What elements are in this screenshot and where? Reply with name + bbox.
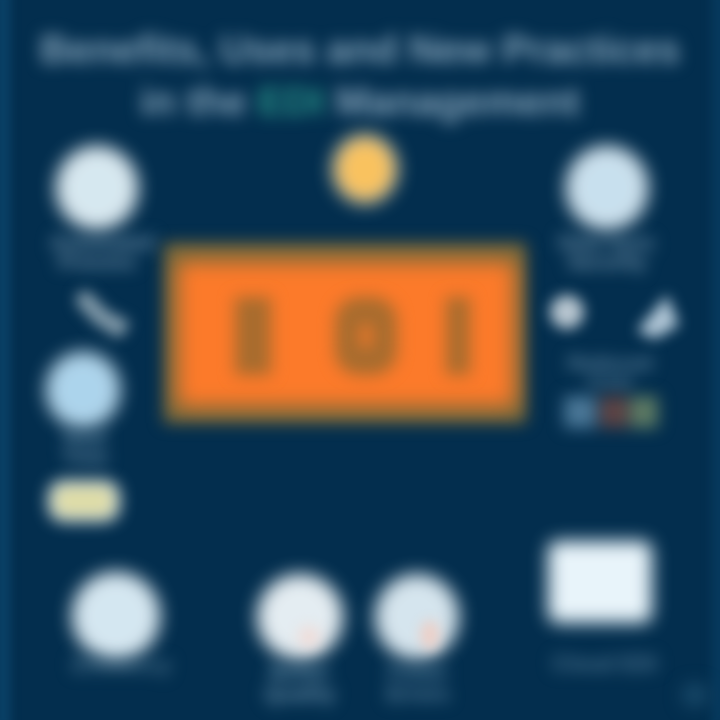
icon: laptop xyxy=(548,541,652,623)
icon: top right circle xyxy=(571,151,643,225)
label: right middle: Cost xyxy=(588,373,632,395)
label: bottom 3: Fewer xyxy=(388,661,448,684)
icon: left middle circle xyxy=(49,355,117,425)
label: top right: Data Sync xyxy=(559,232,655,254)
label: bottom 3 xyxy=(382,661,452,707)
icon: right dot xyxy=(550,295,584,329)
icon: gold circle xyxy=(336,138,394,200)
panel: EDI orange block face xyxy=(178,262,514,406)
icon: bottom circle 3 xyxy=(379,578,455,656)
label: laptop: Cloud EDI xyxy=(552,651,657,676)
label: left middle: Time xyxy=(62,447,108,469)
icon: left bottom chip xyxy=(54,486,114,516)
label: bottom 2: Better xyxy=(270,661,330,684)
label: left middle xyxy=(58,427,112,470)
icon: right arrow xyxy=(631,290,687,348)
label: top right: Security xyxy=(568,252,646,274)
label: top left xyxy=(46,230,160,276)
accent on circle 3 xyxy=(420,620,440,650)
label: right middle xyxy=(564,350,656,395)
label: top right xyxy=(554,228,658,278)
legend chips xyxy=(555,386,668,438)
heading: EDI letters: EDI xyxy=(225,297,227,298)
icon: bottom circle 2 xyxy=(261,578,339,656)
label: bottom 1: Efficiency xyxy=(72,654,171,677)
icon: bottom circle 1 xyxy=(76,576,156,656)
accent on circle 2 xyxy=(298,626,320,648)
heading: EDI letters xyxy=(225,287,480,385)
arrow: left diagonal xyxy=(68,283,136,345)
watermark xyxy=(682,684,708,706)
label: bottom 3: Errors xyxy=(386,683,450,706)
label: right middle: Reduced xyxy=(568,353,652,375)
label: bottom 2: Quality xyxy=(264,683,336,706)
title: Benefits, Uses and New Practices xyxy=(40,28,680,72)
label: left middle: Real xyxy=(64,427,106,449)
label: bottom 2 xyxy=(260,660,340,710)
label: top left: Automated xyxy=(50,232,154,254)
icon: top left circle xyxy=(61,151,133,225)
title xyxy=(32,26,686,132)
panel: EDI orange block outer xyxy=(164,243,526,423)
title: in the EDI Management xyxy=(140,80,580,124)
label: top left: Process xyxy=(58,252,136,274)
